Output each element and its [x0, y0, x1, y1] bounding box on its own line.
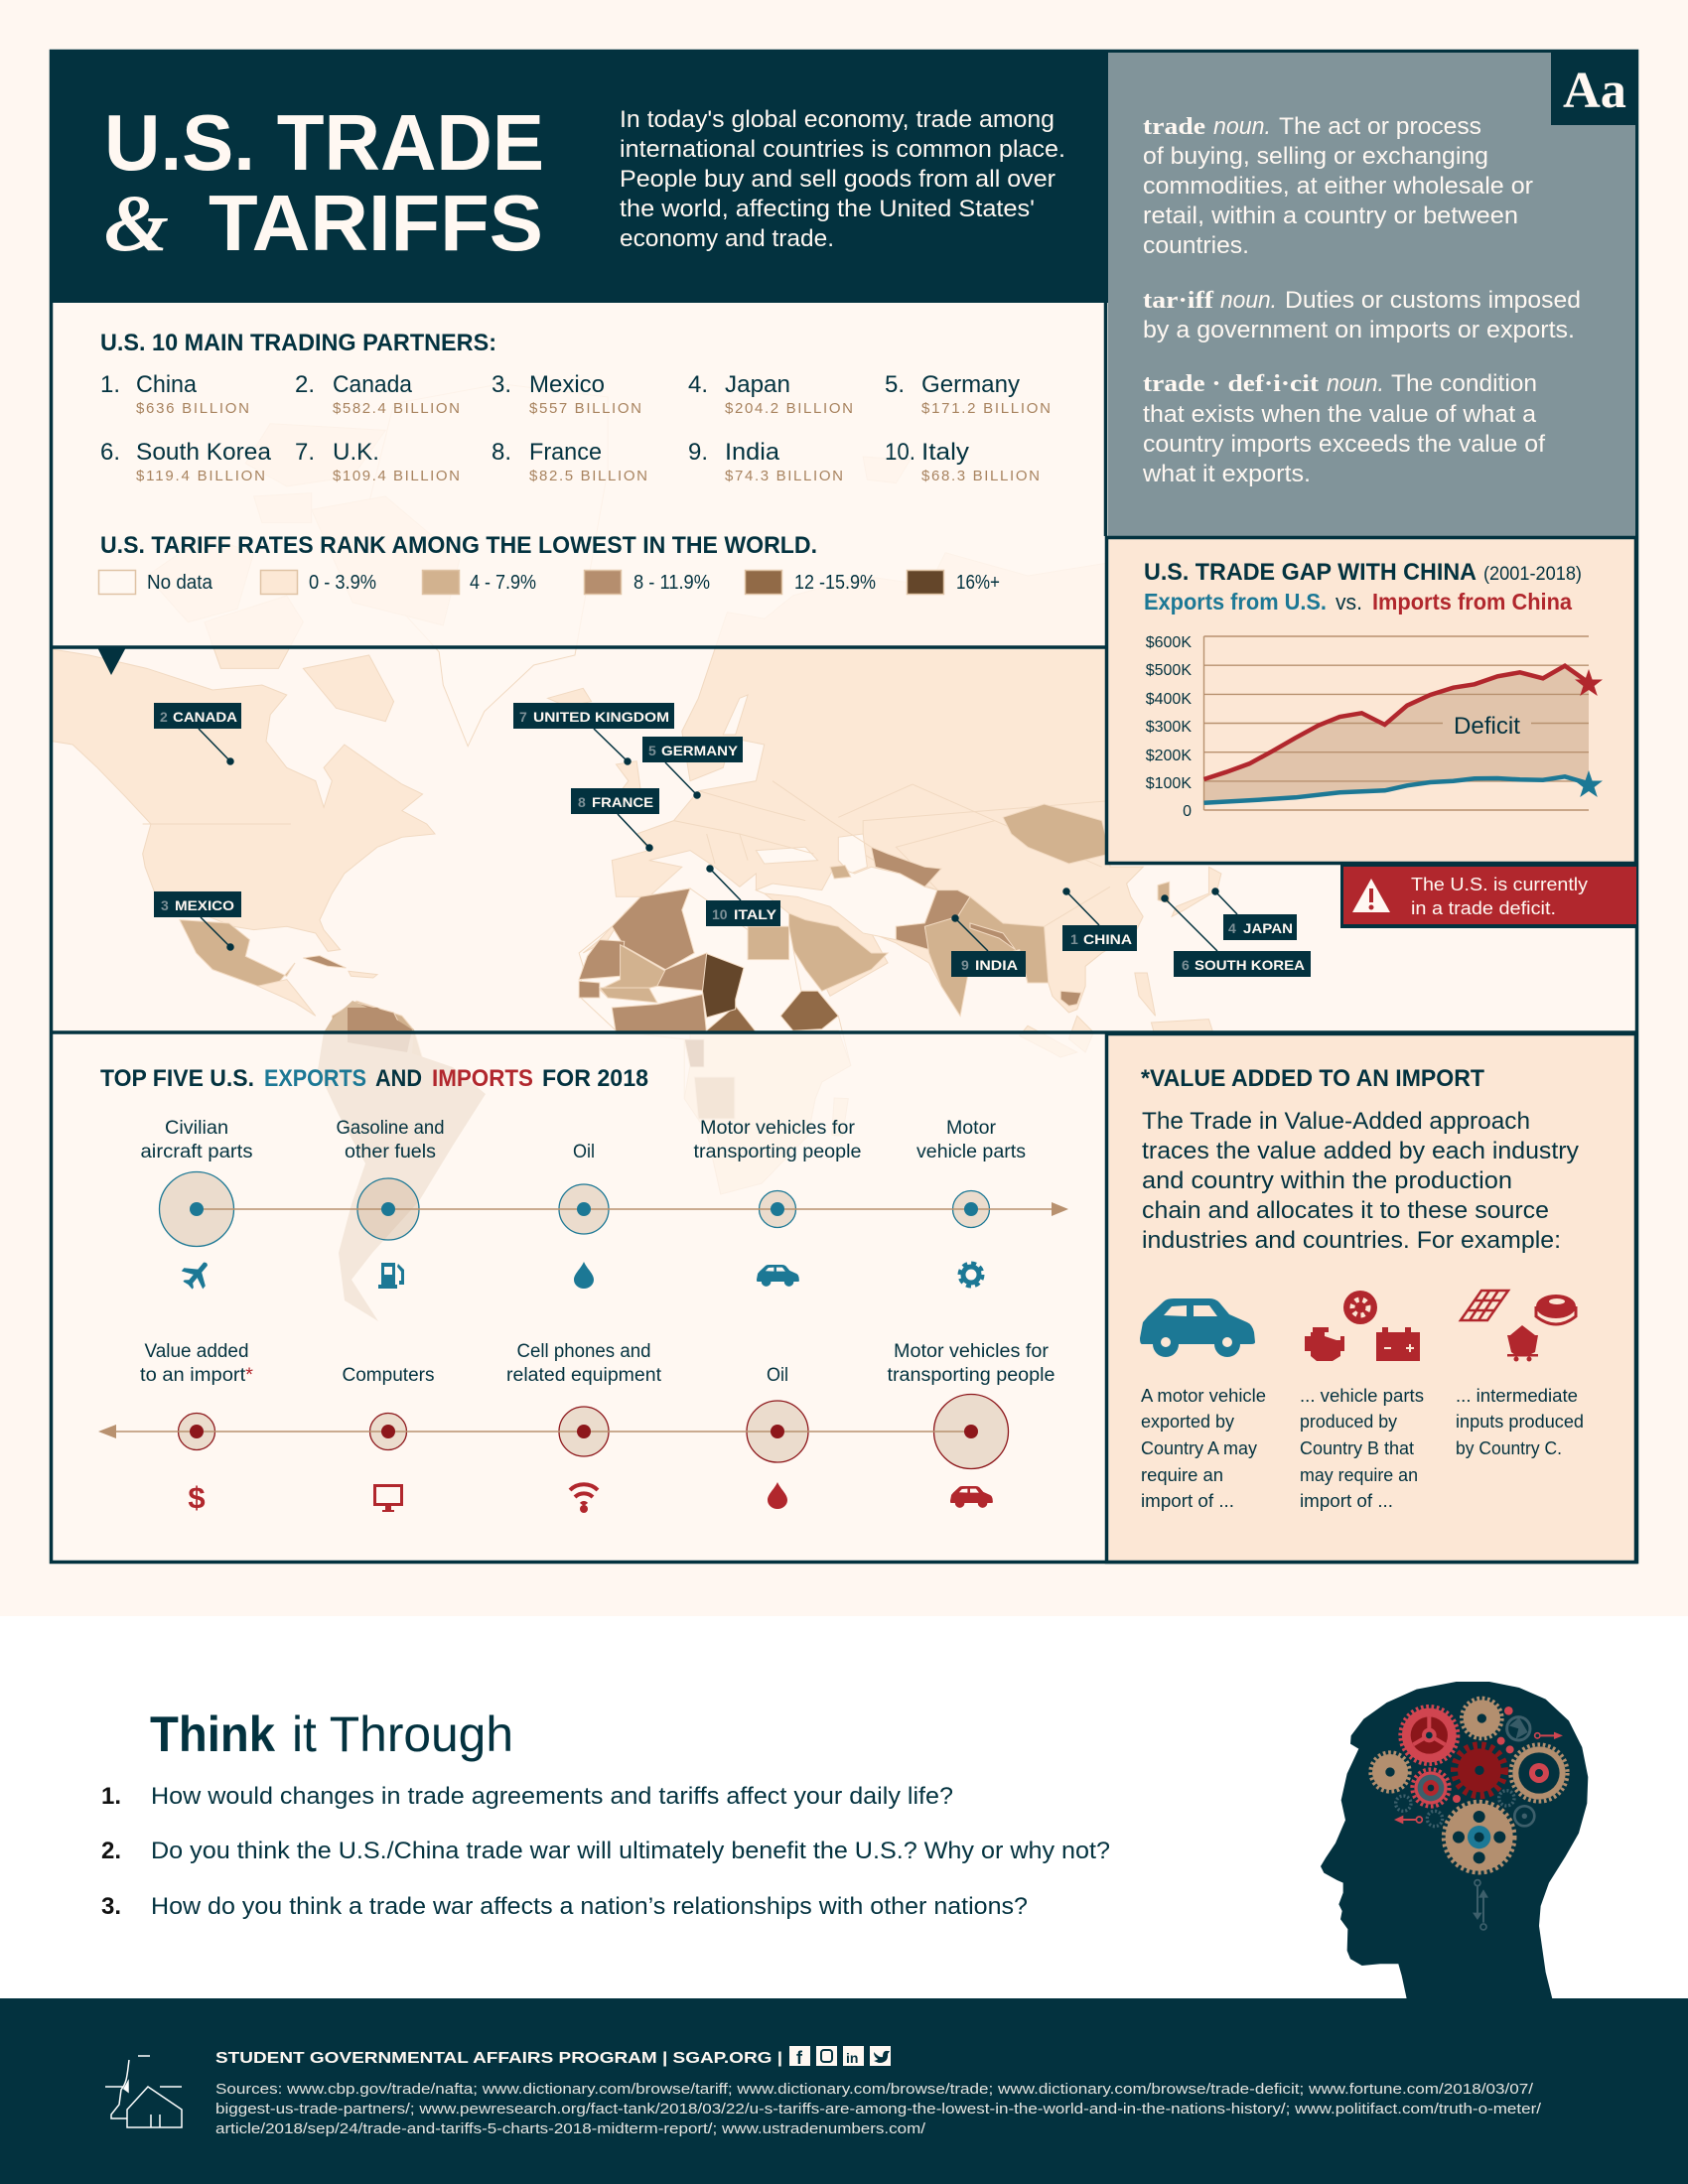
panel: trading partners: Japan: [725, 371, 790, 398]
box frame: [52, 52, 1636, 1563]
panel: definitions: countries.: [1143, 232, 1249, 259]
country labels: 3: [161, 897, 169, 913]
icon: head with gears: [1321, 1682, 1588, 1998]
fade overlays on panels: [50, 303, 1105, 1564]
line chart: [1146, 634, 1603, 820]
sources: article/2018/sep/24/trade-and-tariffs-5-charts-2018-midterm-report/; www.ustradenumbers.com/: [215, 2121, 926, 2137]
country labels: FRANCE: [592, 794, 653, 810]
import labels: to an import *: [140, 1365, 254, 1386]
country labels: 9: [961, 957, 969, 973]
program line: STUDENT GOVERNMENTAL AFFAIRS PROGRAM | SGAP.ORG |: [215, 2050, 782, 2067]
panel: trading partners: 8.: [492, 439, 511, 466]
panel: trading partners: $119.4 BILLION: [136, 468, 265, 484]
questions: 3.: [101, 1893, 121, 1920]
sources: [215, 2082, 1542, 2137]
panel: definitions: trade · def·i·cit: [1143, 371, 1319, 397]
icon: car: [1140, 1298, 1255, 1357]
panel: definitions: commodities, at either wholesale or: [1143, 173, 1533, 200]
chart heading: (2001-2018): [1483, 564, 1582, 585]
chart heading: vs.: [1336, 590, 1362, 614]
panel: trading partners: 5.: [885, 371, 905, 398]
country labels: 4: [1228, 920, 1236, 936]
panel: trading partners: U.K.: [333, 439, 379, 466]
panel: definitions: noun.: [1220, 287, 1277, 314]
section heading: EXPORTS: [264, 1065, 366, 1092]
line chart: $300K: [1146, 719, 1192, 736]
export labels: [141, 1118, 1026, 1162]
country labels: [154, 703, 1311, 977]
chart heading: U.S. TRADE GAP WITH CHINA: [1144, 559, 1477, 586]
export labels: other fuels: [345, 1142, 436, 1162]
panel: trading partners: China: [136, 371, 198, 398]
intro text: People buy and sell goods from all over: [620, 166, 1055, 193]
questions: How would changes in trade agreements and tariffs affect your daily life?: [151, 1783, 953, 1810]
panel: top five exports and imports: [98, 1065, 1068, 1515]
chart heading: Exports from U.S.: [1144, 589, 1327, 614]
import bubbles: [98, 1394, 1009, 1469]
icons: social media: [789, 2046, 891, 2068]
import labels: Computers: [342, 1365, 435, 1386]
export bubbles: [159, 1171, 1068, 1247]
export labels: Civilian: [165, 1118, 228, 1139]
panel: trading partners: 6.: [100, 439, 120, 466]
header panel: [50, 50, 1109, 303]
panel: trading partners: 1.: [100, 371, 120, 398]
country label leaders: [199, 729, 1237, 951]
panel: definitions: noun.: [1213, 113, 1271, 140]
country labels: INDIA: [975, 957, 1018, 973]
country labels: 7: [519, 709, 527, 725]
questions: Do you think the U.S./China trade war will ultimately benefit the U.S.? Why or why not?: [151, 1838, 1110, 1864]
export labels: Motor vehicles for: [700, 1118, 856, 1139]
map legend: 16%+: [956, 572, 1000, 594]
sources: biggest-us-trade-partners/; www.pewresearch.org/fact-tank/2018/03/22/u-s-tariffs-are-among-the-lowest-in-the-world-and-in-the-nations-history/; www.politifact.com/truth-o-meter/: [215, 2102, 1542, 2117]
title: TARIFFS: [209, 179, 543, 267]
country labels: MEXICO: [175, 897, 234, 913]
think it through heading: [150, 1706, 513, 1762]
value chain captions: may require an: [1300, 1465, 1418, 1485]
panel: trading partners: India: [725, 439, 780, 466]
section heading: [100, 1065, 648, 1092]
value added text: traces the value added by each industry: [1142, 1138, 1579, 1164]
country labels: UNITED KINGDOM: [533, 709, 669, 725]
panel: footer: [0, 1998, 1688, 2184]
panel: trading partners: $68.3 BILLION: [921, 468, 1040, 484]
callout: trade deficit: The U.S. is currently: [1411, 875, 1588, 894]
panel: definitions: that exists when the value of what a: [1143, 401, 1537, 428]
export labels: transporting people: [693, 1142, 862, 1162]
panel: trading partners: $204.2 BILLION: [725, 400, 853, 417]
icon: intermediate inputs: [1461, 1291, 1576, 1362]
title: [104, 98, 544, 268]
panel: definitions: trade: [1143, 114, 1205, 140]
import labels: Value added: [145, 1341, 248, 1362]
panel: trading partners: Mexico: [529, 371, 605, 398]
intro text: [620, 106, 1065, 252]
panel: definitions: what it exports.: [1142, 461, 1311, 487]
import labels: transporting people: [888, 1365, 1055, 1386]
import icons: [188, 1480, 993, 1515]
think it through heading: it Through: [292, 1706, 513, 1762]
panel: trade gap chart: [1106, 538, 1636, 864]
panel: trading partners: $171.2 BILLION: [921, 400, 1051, 417]
value added text: and country within the production: [1142, 1167, 1512, 1194]
value chain captions: produced by: [1300, 1412, 1397, 1432]
panel: definitions: of buying, selling or exchanging: [1143, 143, 1488, 170]
world tariff map: [52, 384, 1331, 1194]
chart heading: [1144, 559, 1582, 614]
panel: trading partners: South Korea: [136, 439, 272, 466]
line chart: $100K: [1146, 775, 1192, 792]
line chart: $500K: [1146, 662, 1192, 679]
panel: definitions: The condition: [1391, 370, 1537, 397]
country labels: 10: [712, 906, 728, 922]
value chain captions: import of ...: [1300, 1491, 1393, 1511]
map marker triangle: [97, 647, 126, 675]
country labels: CANADA: [173, 709, 237, 725]
value added text: chain and allocates it to these source: [1142, 1197, 1549, 1224]
country labels: ITALY: [734, 906, 777, 922]
panel: trading partners: $557 BILLION: [529, 400, 641, 417]
line chart: $200K: [1146, 748, 1192, 764]
section heading: IMPORTS: [432, 1065, 533, 1092]
map legend: 12 -15.9%: [794, 572, 876, 594]
panel: trading partners: 7.: [295, 439, 315, 466]
value chain captions: A motor vehicle: [1141, 1386, 1266, 1406]
export labels: Gasoline and: [336, 1118, 445, 1139]
section heading: AND: [375, 1065, 422, 1092]
callout: trade deficit: [1340, 864, 1638, 928]
line chart: $400K: [1146, 691, 1192, 708]
map legend: 4 - 7.9%: [470, 572, 536, 594]
icons: social media: in: [846, 2050, 858, 2066]
panel: definitions: [1108, 50, 1637, 536]
panel: definitions: by a government on imports or exports.: [1143, 317, 1575, 343]
import labels: Oil: [767, 1365, 788, 1386]
panel: value added: [1106, 1034, 1636, 1563]
value chain captions: import of ...: [1141, 1491, 1234, 1511]
value chain captions: ... intermediate: [1456, 1386, 1578, 1406]
panel: definitions: noun.: [1327, 370, 1384, 397]
country labels: SOUTH KOREA: [1195, 957, 1305, 973]
tariff heading: U.S. TARIFF RATES RANK AMONG THE LOWEST IN THE WORLD.: [100, 532, 817, 559]
country labels: JAPAN: [1243, 920, 1293, 936]
intro text: In today's global economy, trade among: [620, 106, 1055, 133]
questions: [101, 1783, 1110, 1920]
export labels: Oil: [573, 1142, 595, 1162]
section heading: TOP FIVE U.S.: [100, 1065, 254, 1092]
value chain captions: inputs produced: [1456, 1412, 1584, 1432]
country labels: 1: [1070, 931, 1078, 947]
panel: definitions: The act or process: [1279, 113, 1481, 140]
value added text: industries and countries. For example:: [1142, 1227, 1561, 1254]
country labels: 2: [160, 709, 168, 725]
line chart: $600K: [1146, 634, 1192, 651]
panel: trading partners: [100, 330, 1051, 484]
callout: trade deficit: in a trade deficit.: [1411, 898, 1556, 918]
value chain captions: ... vehicle parts: [1300, 1386, 1424, 1406]
south america north: [348, 1008, 412, 1052]
value added text: The Trade in Value-Added approach: [1142, 1108, 1530, 1135]
sources: Sources: www.cbp.gov/trade/nafta; www.dictionary.com/browse/tariff; www.dictionary.com/browse/trade; www.dictionary.com/browse/trade-deficit; www.fortune.com/2018/03/07/: [215, 2082, 1534, 2098]
panel: trading partners: $582.4 BILLION: [333, 400, 460, 417]
intro text: international countries is common place.: [620, 136, 1065, 163]
questions: 2.: [101, 1838, 121, 1864]
panel: definitions: retail, within a country or between: [1143, 203, 1518, 229]
title: U.S. TRADE: [104, 98, 544, 187]
panel: trading partners: 3.: [492, 371, 511, 398]
panel: trading partners: Germany: [921, 371, 1020, 398]
intro text: economy and trade.: [620, 225, 834, 252]
panel: trading partners: $82.5 BILLION: [529, 468, 647, 484]
value added heading: *VALUE ADDED TO AN IMPORT: [1141, 1065, 1484, 1092]
country labels: GERMANY: [661, 743, 739, 758]
panel: definitions: Aa: [1563, 63, 1626, 119]
title: &: [104, 178, 169, 268]
country labels: 5: [648, 743, 656, 758]
line chart: Deficit: [1454, 713, 1520, 740]
country labels: 8: [578, 794, 586, 810]
panel: trading partners: U.S. 10 MAIN TRADING PARTNERS:: [100, 330, 496, 356]
icons: social media: f: [796, 2048, 803, 2068]
value chain captions: Country A may: [1141, 1438, 1257, 1458]
panel: trading partners: 9.: [688, 439, 708, 466]
map legend: 0 - 3.9%: [309, 572, 376, 594]
panel: definitions: country imports exceeds the value of: [1143, 431, 1545, 458]
intro text: the world, affecting the United States': [620, 196, 1035, 222]
value added text: [1142, 1108, 1579, 1254]
think it through heading: Think: [150, 1706, 275, 1762]
map legend: [99, 570, 1000, 594]
import labels: [140, 1341, 1055, 1386]
value chain captions: [1141, 1386, 1584, 1511]
panel: definitions: Duties or customs imposed: [1285, 287, 1581, 314]
value chain captions: Country B that: [1300, 1438, 1414, 1458]
questions: How do you think a trade war affects a nation’s relationships with other nations?: [151, 1893, 1028, 1920]
panel: trading partners: 10.: [885, 439, 915, 466]
import labels: related equipment: [506, 1365, 662, 1386]
questions: 1.: [101, 1783, 121, 1810]
map legend: 8 - 11.9%: [633, 572, 710, 594]
export icons: [177, 1254, 982, 1295]
panel: trading partners: $109.4 BILLION: [333, 468, 460, 484]
panel: definitions: tar·iff: [1143, 288, 1214, 314]
icon: vehicle parts: [1305, 1291, 1420, 1361]
panel: trading partners: 2.: [295, 371, 315, 398]
value chain captions: require an: [1141, 1465, 1223, 1485]
section heading: FOR 2018: [542, 1065, 648, 1092]
panel: trading partners: Italy: [921, 439, 969, 466]
export labels: vehicle parts: [916, 1142, 1026, 1162]
export labels: aircraft parts: [141, 1142, 252, 1162]
export labels: Motor: [946, 1118, 997, 1139]
chart heading: Imports from China: [1372, 589, 1572, 614]
country labels: 6: [1182, 957, 1190, 973]
panel: trading partners: 4.: [688, 371, 708, 398]
panel: trading partners: France: [529, 439, 602, 466]
panel: trading partners: Canada: [333, 371, 413, 398]
import icons: $: [188, 1480, 206, 1515]
import labels: Cell phones and: [516, 1341, 651, 1362]
panel: trading partners: $74.3 BILLION: [725, 468, 843, 484]
panel: trading partners: $636 BILLION: [136, 400, 249, 417]
icon: capitol logo: [105, 2056, 182, 2127]
line chart: 0: [1183, 803, 1192, 820]
import labels: Motor vehicles for: [894, 1341, 1050, 1362]
south america: [318, 1001, 486, 1321]
map legend: No data: [147, 572, 213, 594]
value chain captions: exported by: [1141, 1412, 1234, 1432]
value chain captions: by Country C.: [1456, 1438, 1562, 1458]
country labels: CHINA: [1083, 931, 1132, 947]
